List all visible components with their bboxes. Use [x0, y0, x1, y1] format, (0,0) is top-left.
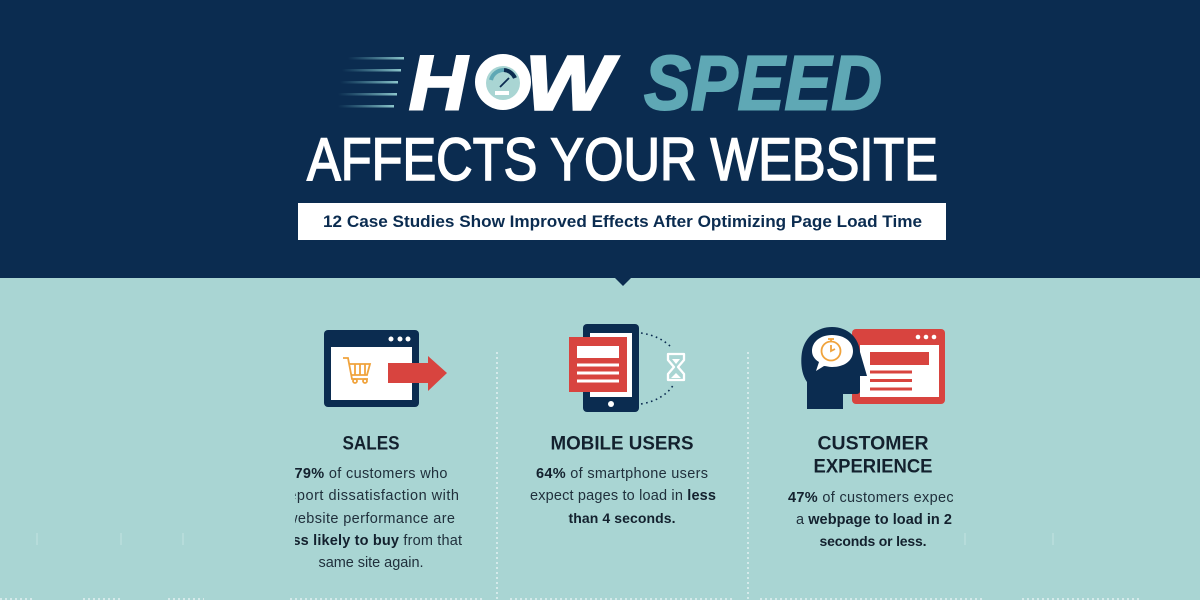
subtitle banner: 12 Case Studies Show Improved Effects After Optimizing Page Load Time [323, 212, 922, 231]
heading: customer experience: CUSTOMER [818, 432, 928, 454]
heading: customer experience [814, 432, 932, 478]
subtitle banner [298, 203, 946, 240]
text: customer statistic: a webpage to load in 2 [796, 512, 952, 528]
title: HOW [409, 40, 620, 126]
divider: column one and two [496, 352, 498, 600]
text: mobile statistic: than 4 seconds. [568, 510, 676, 526]
faint tick marks [37, 533, 1053, 545]
icon: sales window with cart and arrow [324, 330, 447, 407]
text: sales statistic: website performance are [286, 511, 455, 527]
heading: mobile users: MOBILE USERS [550, 432, 694, 454]
icon: head with clock and browser window [801, 327, 945, 409]
panel: header band [0, 0, 1200, 286]
text: customer statistic: seconds or less. [820, 533, 926, 549]
text: sales statistic: 79% of customers who [294, 466, 448, 482]
text: sales statistic: less likely to buy from that [280, 533, 462, 549]
text: sales statistic: report dissatisfaction with [283, 488, 459, 504]
title: SPEED: SPEED [644, 40, 882, 126]
title: HOW: H [409, 40, 468, 126]
text: mobile statistic: expect pages to load in less [530, 488, 716, 504]
text: mobile statistic [530, 466, 716, 526]
text: sales statistic: same site again. [318, 555, 424, 571]
icon: speed lines [338, 57, 404, 108]
text: customer statistic: 47% of customers expect [788, 490, 958, 506]
text: sales statistic [280, 466, 462, 571]
heading: customer experience: EXPERIENCE [814, 456, 932, 478]
text: customer statistic [788, 490, 958, 549]
icon: speedometer [486, 66, 520, 100]
title: HOW: W [525, 40, 620, 126]
icon: tablet with page and hourglass [569, 324, 684, 412]
text: mobile statistic: 64% of smartphone users [536, 466, 708, 482]
divider: column two and three [747, 352, 749, 600]
heading: sales: SALES [342, 432, 400, 454]
bottom dotted dividers [0, 598, 1140, 600]
title: affects your website: AFFECTS YOUR WEBSITE [307, 126, 938, 193]
